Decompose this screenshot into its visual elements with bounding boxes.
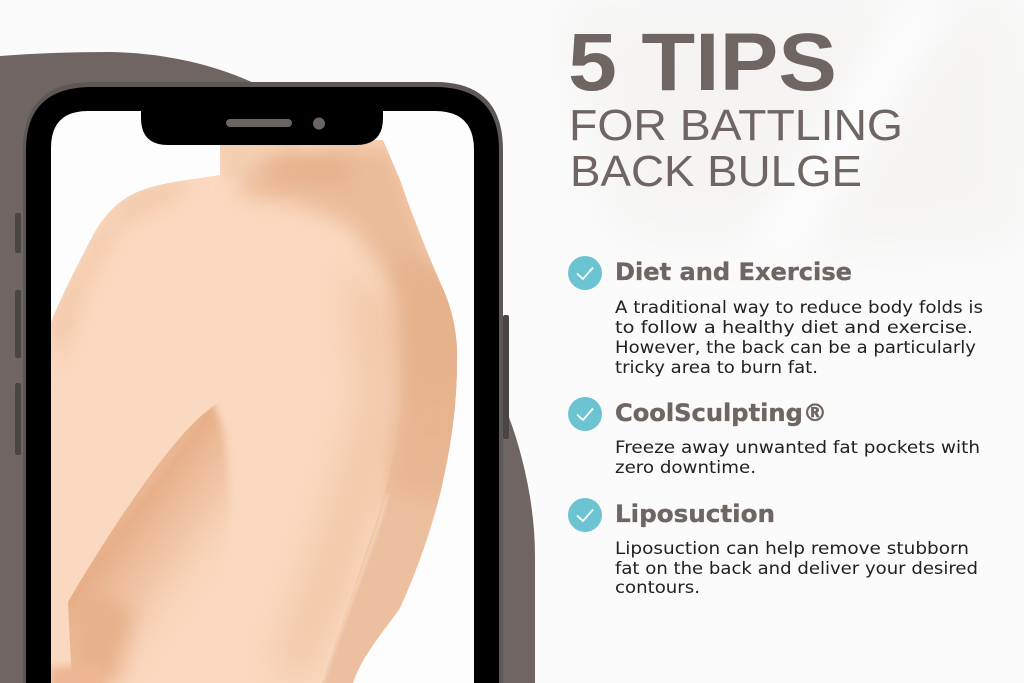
phone [15,82,509,683]
title: BACK BULGE [570,147,862,196]
body: However, the back can be a particularly [615,338,976,358]
phone outer rim [23,82,503,683]
notch camera [313,118,325,130]
heading: Liposuction [615,500,775,528]
notch speaker [226,119,292,127]
phone notch [141,108,383,145]
icon: check [568,256,602,290]
title [568,17,903,196]
flank highlight line [323,495,387,683]
right flank shading [275,270,400,683]
body: zero downtime. [615,458,756,478]
neck and shoulder shading [240,145,450,300]
icon: check [568,397,602,431]
phone screen [51,111,474,683]
heading: Diet and Exercise [615,258,852,286]
body: contours. [615,578,700,598]
armpit and side shading [60,400,230,683]
phone side buttons [15,213,509,455]
phone body [26,87,499,683]
body: A traditional way to reduce body folds is [615,298,983,318]
body [615,438,980,478]
tip 1: diet and exercise [568,256,983,378]
icon: check [568,498,602,532]
neck [220,145,296,177]
title: 5 TIPS [568,17,837,108]
body: to follow a healthy diet and exercise. [615,318,973,338]
body: Freeze away unwanted fat pockets with [615,438,980,458]
body [615,539,978,598]
dark background blob [0,52,535,683]
title: FOR BATTLING [569,101,903,150]
body [615,298,983,378]
body: Liposuction can help remove stubborn [615,539,969,559]
bottom shadow [50,662,105,683]
body: fat on the back and deliver your desired [615,559,978,579]
tip 2: coolsculpting [568,397,980,478]
body: tricky area to burn fat. [615,358,818,378]
back illustration [40,130,480,683]
heading: CoolSculpting® [615,399,827,427]
tip 3: liposuction [568,498,978,598]
